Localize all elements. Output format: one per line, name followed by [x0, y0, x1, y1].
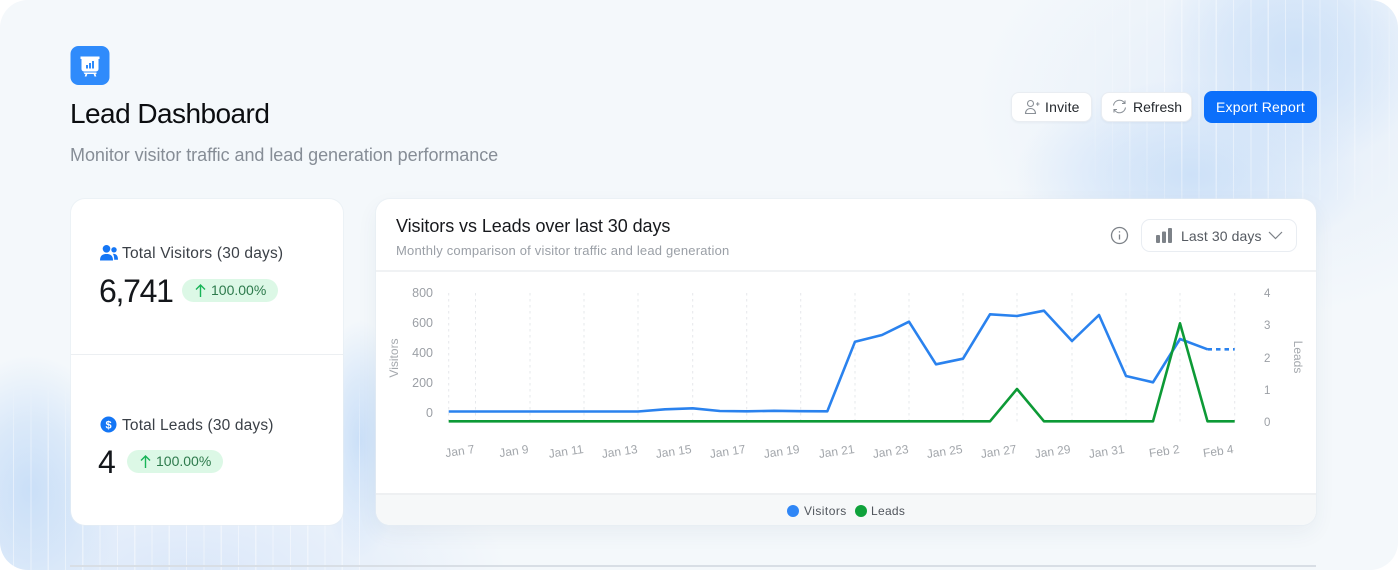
- metric: total visitors: [99, 245, 283, 309]
- left axis values: [412, 286, 433, 420]
- button: export report: [1204, 91, 1317, 123]
- x axis labels: Jan 19: [763, 442, 801, 461]
- left axis values: 200: [412, 376, 433, 390]
- button: export report: Export Report: [1216, 99, 1305, 115]
- line chart: [387, 286, 1305, 461]
- icon: refresh: [1113, 100, 1126, 114]
- x axis labels: Jan 11: [548, 442, 585, 461]
- right axis values: 2: [1264, 353, 1270, 365]
- label: invite: Invite: [1045, 99, 1080, 115]
- chart subheading: Monthly comparison of visitor traffic and lead generation: [396, 243, 729, 258]
- text: leads change: 100.00%: [156, 453, 211, 469]
- right axis title: Leads: [1291, 341, 1305, 373]
- x axis labels: Feb 4: [1202, 442, 1235, 460]
- dropdown: period: [1141, 219, 1297, 252]
- left axis values: 800: [412, 286, 433, 300]
- icon: info: [1110, 226, 1128, 244]
- x axis labels: Jan 7: [444, 442, 476, 460]
- divider: [71, 354, 343, 355]
- icon: dollar coin: $: [105, 420, 112, 432]
- bottom divider: [70, 565, 1316, 567]
- badge: leads change: [127, 450, 223, 473]
- right axis values: 4: [1264, 288, 1271, 300]
- label: period: Last 30 days: [1181, 228, 1262, 244]
- icon: users: [100, 245, 118, 260]
- series: visitors: [449, 311, 1235, 412]
- x axis labels: Jan 13: [601, 442, 639, 461]
- legend: visitors: Visitors: [804, 504, 847, 518]
- chart heading: Visitors vs Leads over last 30 days: [396, 216, 670, 236]
- icon: presentation board: [70, 46, 110, 85]
- x axis labels: [444, 442, 1235, 461]
- label: total leads: Total Leads (30 days): [122, 417, 274, 434]
- x axis labels: Jan 25: [926, 442, 964, 461]
- left axis values: 600: [412, 316, 433, 330]
- label: refresh: Refresh: [1133, 99, 1182, 115]
- badge: visitors change: [182, 279, 278, 302]
- right axis values: 3: [1264, 320, 1270, 332]
- title: Lead Dashboard: [70, 98, 269, 129]
- button: refresh: [1101, 92, 1192, 122]
- panel: chart card: [376, 199, 1316, 525]
- icon: add user: [1024, 100, 1040, 114]
- x axis labels: Jan 21: [818, 442, 856, 461]
- icon: chevron: [1268, 232, 1282, 240]
- x axis labels: Jan 27: [980, 442, 1018, 461]
- right axis values: 0: [1264, 417, 1270, 429]
- button: invite: [1011, 92, 1092, 122]
- x axis labels: Jan 15: [655, 442, 693, 461]
- x axis labels: Jan 29: [1034, 442, 1072, 461]
- icon: dollar coin: [100, 416, 116, 432]
- right axis values: [1264, 288, 1271, 429]
- x axis labels: Jan 31: [1088, 442, 1126, 461]
- left axis values: 400: [412, 346, 433, 360]
- header divider: [376, 270, 1316, 272]
- label: total visitors: Total Visitors (30 days): [122, 245, 283, 262]
- metric: total leads: [98, 416, 274, 480]
- value: leads: 4: [98, 444, 116, 480]
- panel: totals: [71, 199, 343, 525]
- x axis labels: Feb 2: [1148, 442, 1181, 460]
- icon: bars: [1156, 228, 1172, 243]
- text: visitors change: 100.00%: [211, 282, 266, 298]
- legend: leads: [855, 504, 905, 518]
- legend: leads: Leads: [871, 504, 905, 518]
- x axis labels: Jan 9: [498, 442, 530, 460]
- value: visitors: 6,741: [99, 273, 173, 309]
- left axis values: 0: [426, 406, 433, 420]
- x axis labels: Jan 17: [709, 442, 747, 461]
- icon: up arrow: [140, 455, 150, 468]
- right axis values: 1: [1264, 385, 1270, 397]
- x axis labels: Jan 23: [872, 442, 910, 461]
- subtitle: Monitor visitor traffic and lead generation performance: [70, 145, 498, 165]
- left axis title: Visitors: [387, 338, 401, 378]
- series: leads: [449, 323, 1235, 421]
- legend footer: [376, 493, 1316, 525]
- icon: up arrow: [196, 284, 206, 297]
